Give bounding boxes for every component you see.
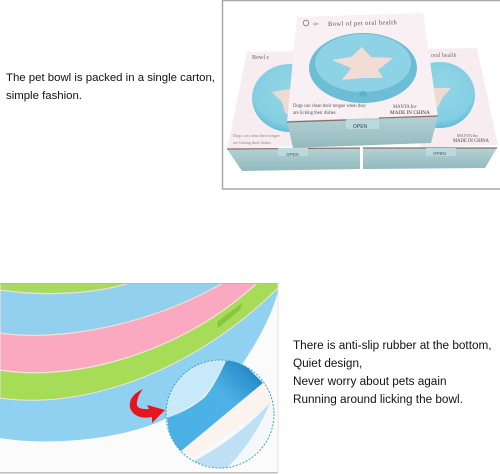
center box: Bowl of pet oral health	[328, 19, 398, 28]
right box: MANTA Inc	[457, 133, 478, 138]
right box: MADE IN CHINA	[453, 139, 490, 144]
left box: Dogs can clean their tongue	[233, 133, 280, 138]
magnifier inset	[160, 360, 278, 470]
text: anti-slip description: There is anti-slip rubber at the bottom,	[293, 338, 492, 352]
left box	[227, 51, 360, 171]
center box: Qe	[313, 21, 319, 26]
left box: are licking their dishes	[233, 140, 271, 145]
text: anti-slip description	[293, 338, 492, 406]
right box	[363, 48, 498, 169]
text: anti-slip description: Running around licking the bowl.	[293, 392, 463, 406]
text: packaging description: The pet bowl is packed in a single carton,	[6, 72, 215, 84]
center box: OPEN	[353, 124, 368, 130]
rim layers	[0, 283, 278, 441]
right box: OPEN	[433, 151, 446, 156]
center box: MADE IN CHINA	[390, 110, 430, 116]
text: packaging description	[6, 72, 215, 102]
right box: oral health	[431, 53, 456, 59]
photo: stacked bowl rims with magnifier	[0, 283, 278, 474]
text: packaging description: simple fashion.	[6, 90, 82, 102]
center box: Dogs can clean their tongue when they	[293, 104, 367, 109]
red arrow	[130, 389, 165, 423]
text: anti-slip description: Quiet design,	[293, 356, 362, 370]
center box: MANTA Inc	[393, 105, 417, 110]
left box: OPEN	[286, 152, 299, 157]
center box: are licking their dishes	[293, 111, 336, 116]
center box	[287, 13, 438, 148]
text: anti-slip description: Never worry about pets again	[293, 374, 446, 388]
left box: Bowl c	[252, 55, 270, 61]
